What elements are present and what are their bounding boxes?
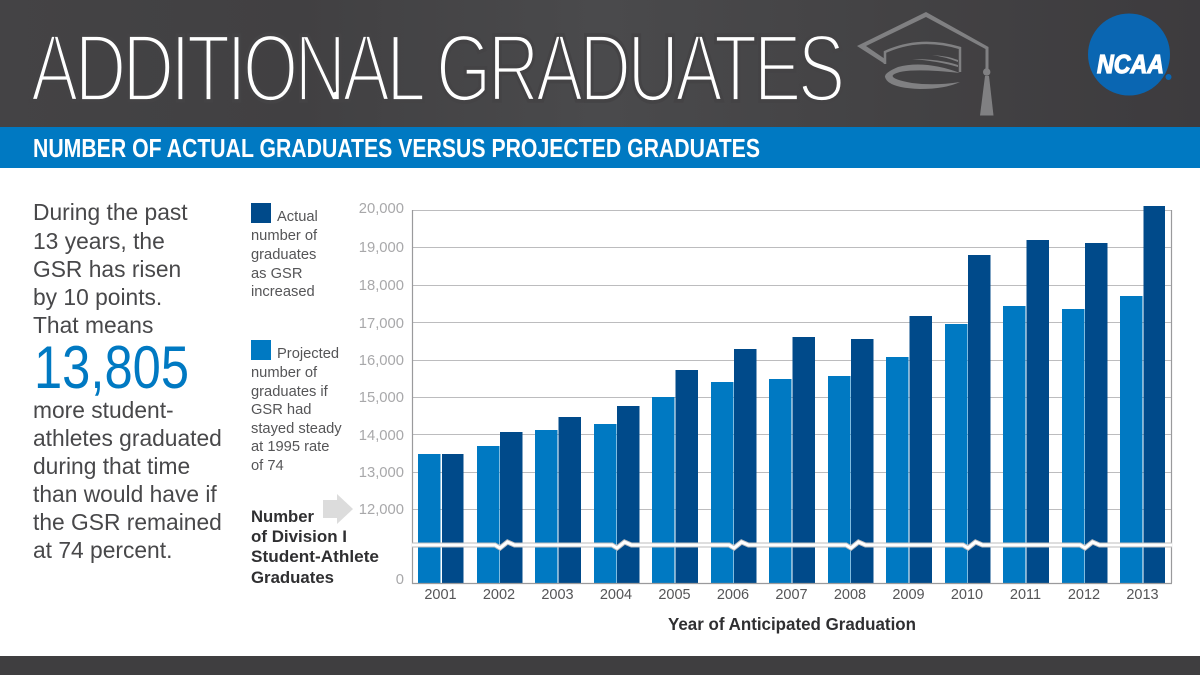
axis title: number of graduates: of Division I bbox=[251, 528, 347, 546]
legend: actual graduates: graduates bbox=[251, 247, 316, 263]
x axis labels bbox=[424, 587, 1159, 603]
legend: actual graduates: number of bbox=[251, 228, 318, 244]
legend: projected graduates: GSR had bbox=[251, 402, 311, 418]
legend: projected graduates: stayed steady bbox=[251, 421, 342, 437]
text block: summary: During the past bbox=[33, 199, 188, 225]
legend: actual graduates: as GSR bbox=[251, 266, 302, 282]
text block: summary: athletes graduated bbox=[33, 425, 222, 451]
x axis labels: 2005 bbox=[658, 587, 691, 603]
text block: summary: 13 years, the bbox=[33, 228, 165, 254]
x axis labels: 2006 bbox=[717, 587, 749, 603]
legend: projected graduates: graduates if bbox=[251, 384, 329, 400]
actual bars bbox=[442, 206, 1165, 583]
x axis title: Year of Anticipated Graduation bbox=[668, 614, 916, 634]
legend: projected graduates bbox=[251, 340, 342, 474]
x axis labels: 2001 bbox=[424, 587, 457, 603]
bar chart bbox=[359, 201, 1172, 634]
axis title: number of graduates bbox=[251, 508, 379, 587]
projected bars bbox=[418, 296, 1142, 583]
text block: summary: GSR has risen bbox=[33, 256, 181, 282]
logo: NCAA: NCAA bbox=[1097, 51, 1164, 79]
y axis labels: 12,000 bbox=[359, 502, 404, 518]
legend: projected graduates: at 1995 rate bbox=[251, 439, 329, 455]
subtitle band bbox=[0, 127, 1200, 168]
text block: summary: at 74 percent. bbox=[33, 537, 172, 563]
footer band bbox=[0, 656, 1200, 675]
text block: summary: the GSR remained bbox=[33, 509, 222, 535]
axis break bbox=[412, 542, 1172, 548]
y axis labels: 13,000 bbox=[359, 465, 404, 481]
grid lines bbox=[412, 210, 1172, 510]
x axis labels: 2008 bbox=[834, 587, 866, 603]
text block: summary: That means bbox=[33, 312, 153, 338]
legend: actual graduates bbox=[251, 203, 318, 300]
text block: summary: during that time bbox=[33, 453, 190, 479]
x axis labels: 2004 bbox=[600, 587, 632, 603]
x axis labels: 2013 bbox=[1126, 587, 1159, 603]
axes bbox=[412, 210, 1172, 584]
axis title: number of graduates: Number bbox=[251, 508, 315, 526]
y axis labels: 19,000 bbox=[359, 240, 404, 256]
legend: actual graduates: increased bbox=[251, 284, 315, 300]
y axis labels: 15,000 bbox=[359, 390, 404, 406]
title: ADDITIONAL GRADUATES bbox=[31, 15, 845, 121]
key number: 13,805 bbox=[34, 334, 189, 401]
logo: NCAA bbox=[1088, 14, 1172, 96]
x axis labels: 2003 bbox=[541, 587, 574, 603]
icon: graduation cap bbox=[857, 12, 994, 116]
legend: projected graduates: of 74 bbox=[251, 458, 284, 474]
x axis labels: 2012 bbox=[1068, 587, 1100, 603]
axis title: number of graduates: Graduates bbox=[251, 569, 334, 587]
x axis labels: 2007 bbox=[775, 587, 808, 603]
legend: projected graduates: number of bbox=[251, 365, 318, 381]
y axis labels: 16,000 bbox=[359, 353, 404, 369]
y axis labels: 20,000 bbox=[359, 201, 404, 217]
x axis labels: 2002 bbox=[483, 587, 515, 603]
y axis labels: 17,000 bbox=[359, 316, 404, 332]
text block: summary: than would have if bbox=[33, 481, 217, 507]
axis title: number of graduates: Student-Athlete bbox=[251, 548, 379, 566]
x axis labels: 2011 bbox=[1010, 587, 1041, 603]
y axis labels: 14,000 bbox=[359, 428, 404, 444]
x axis labels: 2009 bbox=[892, 587, 925, 603]
legend: projected graduates: Projected bbox=[277, 346, 339, 362]
y axis labels: 18,000 bbox=[359, 278, 404, 294]
x axis labels: 2010 bbox=[951, 587, 983, 603]
header band bbox=[0, 0, 1200, 127]
arrow: to axis bbox=[323, 494, 353, 524]
subtitle band: NUMBER OF ACTUAL GRADUATES VERSUS PROJECTED GRADUATES bbox=[33, 133, 760, 163]
y axis labels bbox=[359, 201, 404, 588]
legend: actual graduates: Actual bbox=[277, 209, 318, 225]
text block: summary: more student- bbox=[33, 397, 174, 423]
text block: summary: by 10 points. bbox=[33, 284, 162, 310]
text block: summary bbox=[33, 199, 222, 563]
y axis labels: 0 bbox=[396, 572, 404, 588]
